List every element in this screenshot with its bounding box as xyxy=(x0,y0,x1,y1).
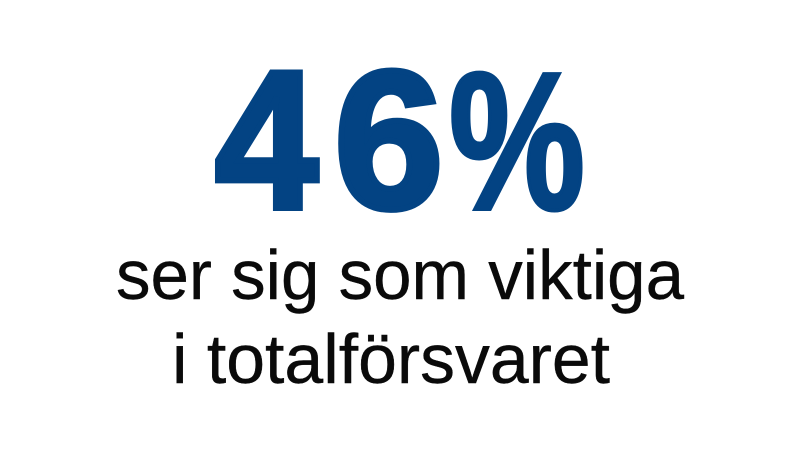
big number: 46%: 4 xyxy=(215,30,318,250)
caption line 2: i totalförsvaret xyxy=(172,320,610,398)
big number: 46%: % xyxy=(449,32,585,251)
caption line 1: ser sig som viktiga xyxy=(116,236,684,314)
big number: 46% xyxy=(215,30,585,251)
big number: 46%: 6 xyxy=(334,30,444,250)
